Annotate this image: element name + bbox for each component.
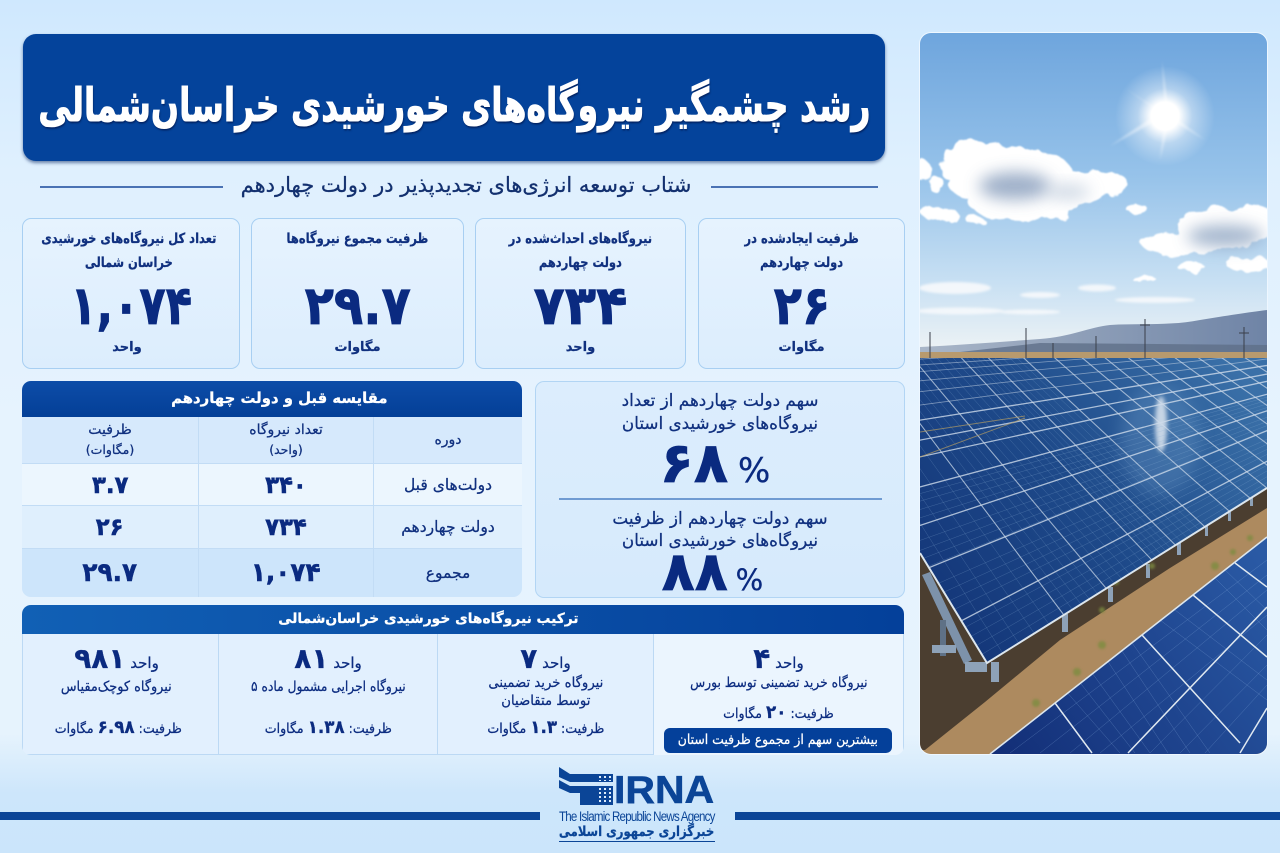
stat card: capacity in 14th government: مگاوات <box>778 340 825 355</box>
badge <box>664 728 892 753</box>
solar array main <box>920 358 1267 662</box>
table rows: دولت‌های قبل <box>404 476 492 494</box>
shadow under array <box>920 488 1267 750</box>
share of plant count: سهم دولت چهاردهم از تعداد <box>622 390 818 410</box>
comparison table <box>22 381 522 597</box>
logo english name: The Islamic Republic News Agency <box>559 809 715 824</box>
column: note 5: نیروگاه اجرایی مشمول ماده ۵ <box>251 679 405 695</box>
stat card: total capacity: مگاوات <box>334 340 381 355</box>
table heading <box>22 381 522 417</box>
badge: بیشترین سهم از مجموع ظرفیت استان <box>678 732 878 748</box>
title banner: رشد چشمگیر نیروگاه‌های خورشیدی خراسان‌شمالی <box>38 78 870 132</box>
stat card: capacity in 14th government <box>698 218 905 369</box>
column: small scale: ظرفیت: ۶.۹۸ مگاوات <box>55 717 182 738</box>
title banner <box>23 34 885 161</box>
logo wordmark: IRNA <box>614 769 714 812</box>
column: applicants <box>438 634 654 755</box>
column: stock exchange: واحد ۴ <box>753 642 804 675</box>
table rows: ۳.۷ <box>92 470 128 498</box>
stat card: total capacity <box>251 218 464 369</box>
column: applicants: توسط متقاضیان <box>501 693 590 709</box>
stat card: plants in 14th government <box>475 218 686 369</box>
footer line right <box>735 812 1280 820</box>
stat card: total plants: تعداد کل نیروگاه‌های خورشیدی <box>41 231 217 247</box>
table rows: (واحد) <box>269 442 303 456</box>
sky <box>920 33 1267 353</box>
column: note 5: ظرفیت: ۱.۳۸ مگاوات <box>264 717 392 738</box>
ground <box>920 480 1267 754</box>
stat card: total plants <box>22 218 240 369</box>
stat card: plants in 14th government: ۷۳۴ <box>534 274 627 337</box>
sun <box>1110 60 1222 166</box>
subtitle: شتاب توسعه انرژی‌های تجدیدپذیر در دولت چهاردهم <box>241 173 691 197</box>
IRNA logo <box>559 767 716 842</box>
table rows <box>22 417 522 597</box>
stat card: plants in 14th government: دولت چهاردهم <box>539 255 622 271</box>
88 percent: ۸۸ % <box>662 540 763 603</box>
share of plant count <box>622 390 818 434</box>
share of capacity: سهم دولت چهاردهم از ظرفیت <box>612 508 828 528</box>
composition panel <box>22 605 904 755</box>
table rows: تعداد نیروگاه <box>249 422 323 438</box>
solar array front <box>990 537 1267 754</box>
column: applicants: واحد ۷ <box>520 642 571 675</box>
table rows: (مگاوات) <box>86 442 134 456</box>
stat card: capacity in 14th government: ظرفیت ایجادشده در <box>744 231 859 247</box>
column: note 5 <box>219 634 438 755</box>
table rows: مجموع <box>426 564 470 582</box>
comparison table: مقایسه قبل و دولت چهاردهم <box>171 389 387 407</box>
column: small scale: واحد ۹۸۱ <box>74 642 159 675</box>
column: stock exchange: نیروگاه خرید تضمینی توسط بورس <box>690 675 867 691</box>
mountains <box>920 310 1267 352</box>
table rows: ۳۴۰ <box>265 470 307 498</box>
stat card: capacity in 14th government: دولت چهاردهم <box>760 255 843 271</box>
table rows: ۲۶ <box>96 513 124 541</box>
table rows: دوره <box>434 432 462 448</box>
column: applicants: ظرفیت: ۱.۳ مگاوات <box>487 717 604 738</box>
column: stock exchange: ظرفیت: ۲۰ مگاوات <box>723 702 834 723</box>
68 percent: ۶۸ % <box>660 431 770 496</box>
table rows: ۷۳۴ <box>265 513 307 541</box>
horizon ground and poles <box>920 319 1267 364</box>
logo emblem <box>559 767 613 805</box>
photo: solar farm <box>920 33 1267 754</box>
clouds <box>915 139 1278 314</box>
table rows: ظرفیت <box>88 422 132 438</box>
composition panel: ترکیب نیروگاه‌های خورشیدی خراسان‌شمالی <box>278 611 578 627</box>
array supports <box>922 498 1253 682</box>
share panel <box>535 381 905 598</box>
vegetation <box>1032 535 1253 707</box>
stat card: plants in 14th government: نیروگاه‌های احداث‌شده در <box>509 231 652 247</box>
stat card: total capacity: ظرفیت مجموع نیروگاه‌ها <box>287 231 428 247</box>
table rows: ۲۹.۷ <box>83 558 137 588</box>
column: stock exchange <box>654 634 904 755</box>
stat card: total plants: خراسان شمالی <box>85 255 173 271</box>
column: note 5: واحد ۸۱ <box>294 642 362 675</box>
table rows: دولت چهاردهم <box>401 518 495 536</box>
share of capacity: نیروگاه‌های خورشیدی استان <box>622 530 818 550</box>
table rows: ۱,۰۷۴ <box>251 558 321 588</box>
share of capacity <box>612 508 828 550</box>
stat card: total capacity: ۲۹.۷ <box>304 274 411 337</box>
stat card: total plants: واحد <box>112 340 142 355</box>
column: small scale: نیروگاه کوچک‌مقیاس <box>61 679 172 695</box>
stat card: total plants: ۱,۰۷۴ <box>70 274 192 337</box>
stat card: capacity in 14th government: ۲۶ <box>773 274 830 337</box>
logo persian name: خبرگزاری جمهوری اسلامی <box>559 824 715 840</box>
column: applicants: نیروگاه خرید تضمینی <box>488 675 603 691</box>
composition heading <box>22 605 904 634</box>
footer line left <box>0 812 540 820</box>
stat card: plants in 14th government: واحد <box>566 340 595 355</box>
share of plant count: نیروگاه‌های خورشیدی استان <box>622 413 818 433</box>
column: small scale <box>22 634 219 755</box>
